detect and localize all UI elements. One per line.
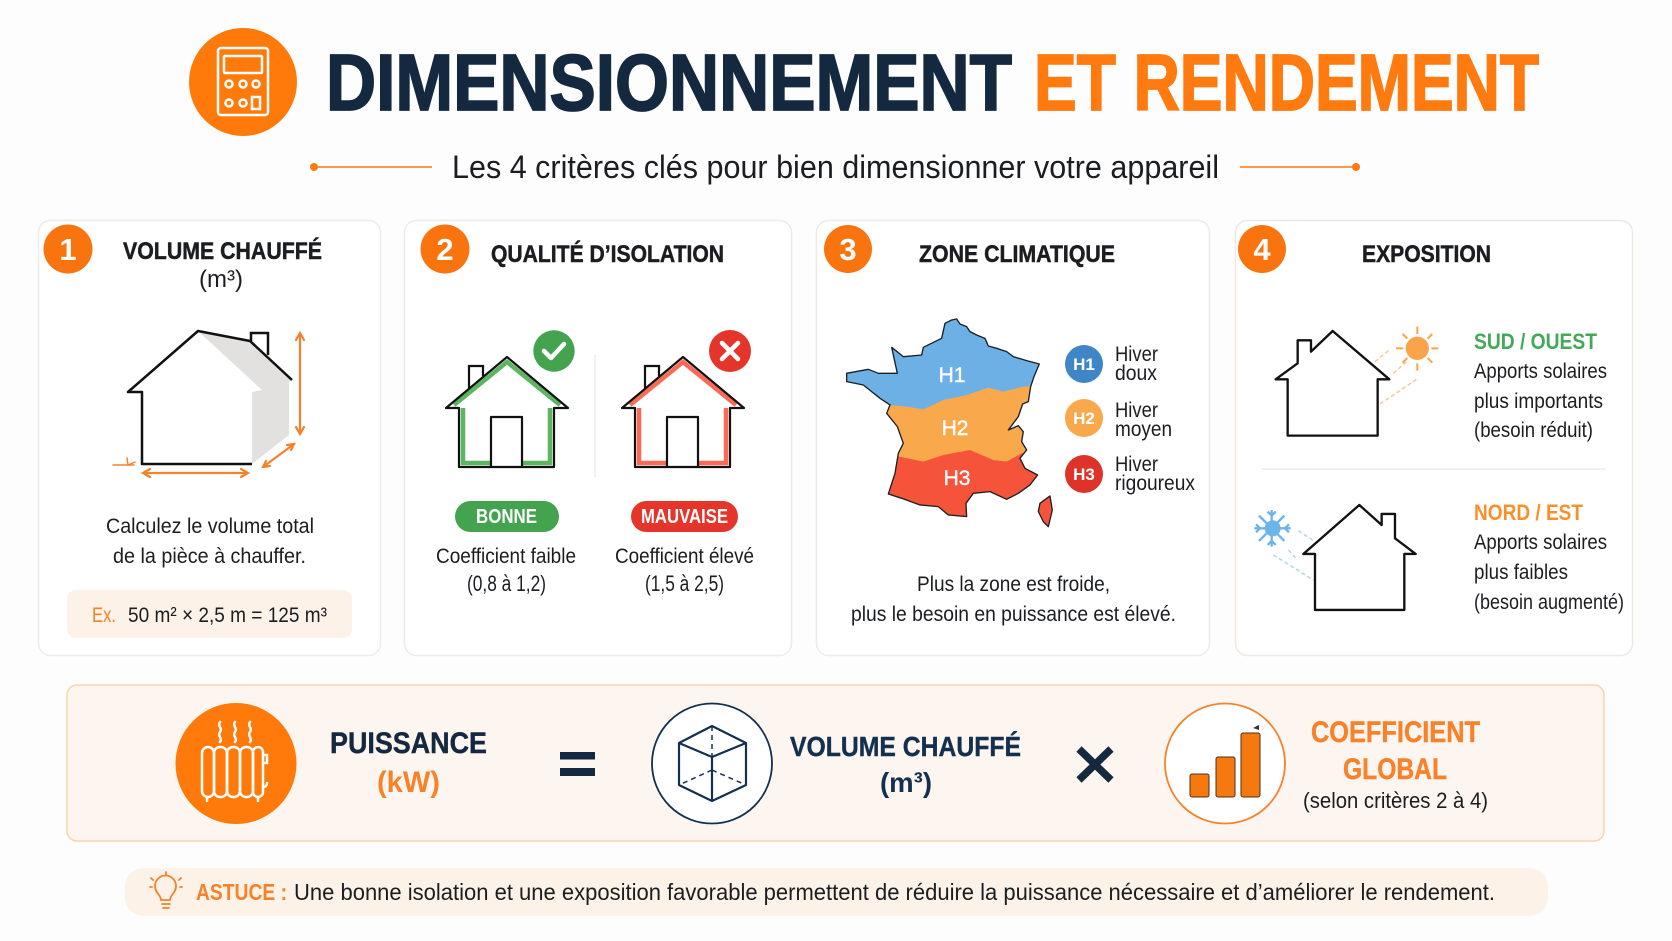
- icon: good insulation house: [446, 357, 568, 467]
- subtitle left rule: [310, 163, 432, 171]
- legend: H1: [1065, 343, 1158, 385]
- icon: house with dimensions: [113, 331, 304, 477]
- text: sud ouest: Apports solaires: [1474, 360, 1607, 383]
- heading: volume chauffé: VOLUME CHAUFFÉ: [123, 237, 322, 265]
- legend: H2: [1065, 399, 1172, 441]
- description: Plus la zone est froide,: [917, 573, 1110, 596]
- badge 2: [420, 224, 470, 274]
- heading: qualité d'isolation: QUALITÉ D’ISOLATION: [491, 240, 724, 268]
- text: nord est: (besoin augmenté): [1474, 591, 1624, 614]
- tip text: Une bonne isolation et une exposition favorable permettent de réduire la puissance nécessaire et d’améliorer le rendement.: [294, 879, 1495, 905]
- pill: bonne: BONNE: [476, 506, 537, 528]
- panel: formula: [67, 685, 1604, 841]
- text: sud ouest: [1474, 329, 1607, 442]
- divider: [1262, 468, 1605, 470]
- description: Calculez le volume total: [106, 514, 314, 538]
- pill: mauvaise: [631, 501, 738, 532]
- icon: radiator: [176, 703, 296, 824]
- example box: 50 m² × 2,5 m = 125 m³: [128, 604, 327, 627]
- text: nord est: plus faibles: [1474, 561, 1568, 584]
- badge 2: 2: [436, 232, 454, 267]
- text: sud ouest: SUD / OUEST: [1474, 329, 1597, 354]
- tip label: ASTUCE :: [196, 879, 287, 905]
- text: coefficient faible: (0,8 à 1,2): [467, 571, 546, 596]
- icon: calculator: [189, 28, 297, 136]
- badge 3: 3: [839, 232, 857, 267]
- text: sud ouest: plus importants: [1474, 390, 1603, 413]
- heading: zone climatique: ZONE CLIMATIQUE: [919, 241, 1115, 268]
- label: volume chauffé: VOLUME CHAUFFÉ: [790, 731, 1021, 762]
- icon: cross mark: [709, 330, 751, 372]
- legend: H2: H2: [1073, 409, 1095, 428]
- icon: house with sun: [1276, 327, 1438, 436]
- label: puissance: PUISSANCE: [330, 727, 487, 760]
- icon: cube: [652, 704, 772, 824]
- badge 4: 4: [1253, 232, 1271, 267]
- label: coefficient global: COEFFICIENT: [1311, 716, 1480, 749]
- badge 1: 1: [59, 232, 77, 267]
- badge 1: [44, 224, 92, 274]
- icon: light bulb: [150, 872, 182, 908]
- legend: H3: H3: [1073, 465, 1095, 484]
- example box: Ex.: [92, 604, 116, 627]
- icon: check mark: [533, 330, 575, 372]
- legend: H3: [1065, 453, 1195, 495]
- legend: H1: H1: [1073, 355, 1095, 374]
- example box: [67, 590, 352, 638]
- label: coefficient global: [1303, 716, 1488, 813]
- label: kW: (kW): [377, 766, 440, 799]
- equals sign: [560, 752, 595, 776]
- panel: qualité d'isolation: [404, 220, 792, 656]
- pill: bonne: [455, 501, 559, 532]
- unit m3: (m³): [199, 266, 243, 293]
- icon: house with cold: [1254, 505, 1416, 610]
- description line 2: plus le besoin en puissance est élevé.: [851, 603, 1176, 626]
- icon: bar chart: [1165, 704, 1285, 824]
- text: nord est: NORD / EST: [1474, 500, 1583, 525]
- label: coefficient global: GLOBAL: [1343, 753, 1447, 786]
- text: coefficient faible: [436, 545, 576, 596]
- callout: astuce: [125, 868, 1548, 916]
- pill: mauvaise: MAUVAISE: [641, 506, 728, 528]
- map of France: H1: [939, 364, 965, 387]
- map of France: H2: [942, 417, 968, 440]
- heading: exposition: EXPOSITION: [1362, 241, 1491, 268]
- panel: zone climatique: [816, 220, 1210, 656]
- legend: H3: rigoureux: [1115, 472, 1195, 495]
- icon: poor insulation house: [622, 357, 744, 467]
- map of France: H3: [944, 467, 970, 490]
- description line 2: de la pièce à chauffer.: [113, 544, 306, 568]
- title accent: ET RENDEMENT: [1034, 38, 1539, 127]
- panel: volume chauffé: [38, 220, 380, 656]
- text: coefficient élevé: [615, 545, 754, 596]
- multiply sign: [1079, 749, 1111, 780]
- text: coefficient faible: Coefficient faible: [436, 545, 576, 568]
- legend: H2: moyen: [1115, 418, 1172, 441]
- text: coefficient élevé: Coefficient élevé: [615, 545, 754, 568]
- label: m3: (m³): [880, 767, 932, 798]
- subtitle right rule: [1240, 163, 1360, 171]
- text: nord est: [1474, 500, 1624, 614]
- title: DIMENSIONNEMENT: [326, 38, 1012, 127]
- legend: H2: Hiver: [1115, 399, 1158, 422]
- divider: [594, 355, 596, 477]
- text: nord est: Apports solaires: [1474, 531, 1607, 554]
- text: sud ouest: (besoin réduit): [1474, 419, 1593, 442]
- panel: exposition: [1236, 220, 1632, 656]
- map of France: [840, 310, 1052, 527]
- badge 3: [824, 225, 872, 273]
- legend: H1: Hiver: [1115, 343, 1158, 366]
- subtitle: Les 4 critères clés pour bien dimensionner votre appareil: [452, 149, 1219, 185]
- text: coefficient élevé: (1,5 à 2,5): [645, 571, 724, 596]
- badge 4: [1238, 225, 1286, 273]
- legend: H3: Hiver: [1115, 453, 1158, 476]
- label: coefficient global: (selon critères 2 à 4): [1303, 788, 1488, 813]
- legend: H1: doux: [1115, 362, 1157, 385]
